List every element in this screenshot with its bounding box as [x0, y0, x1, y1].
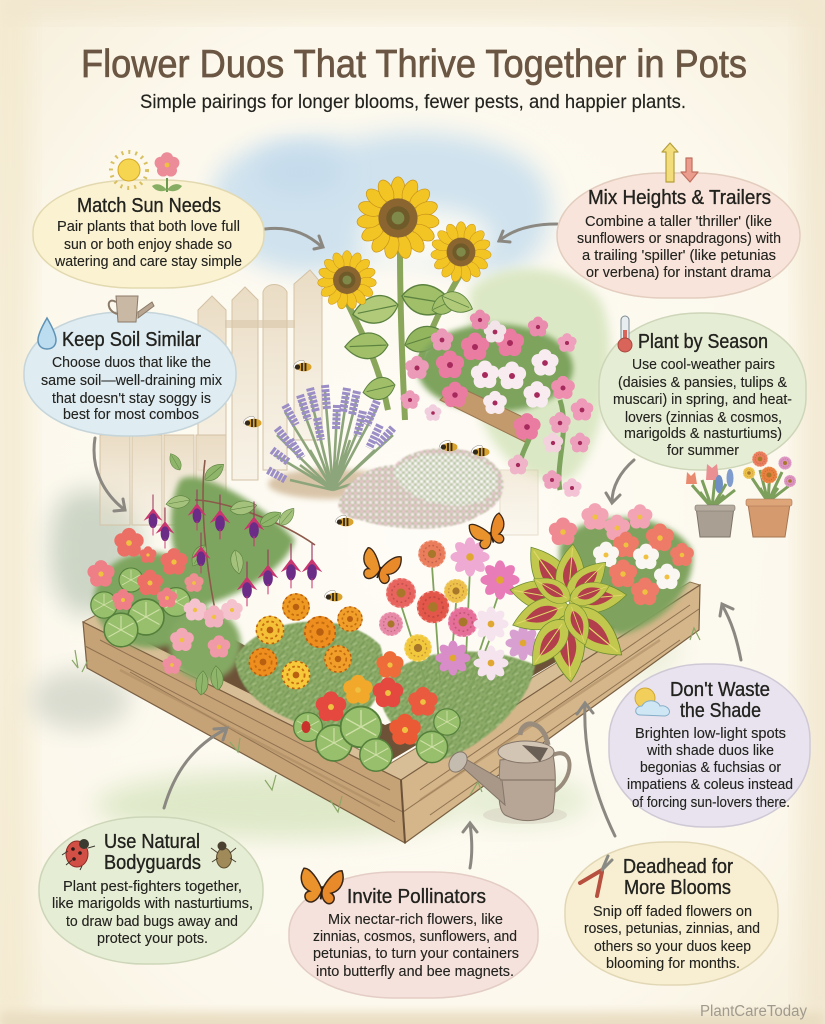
body text: watering and care stay simple — [54, 254, 242, 270]
arrow: pollinators up — [463, 823, 477, 868]
heading: Deadhead for — [623, 856, 733, 878]
icon: up and down arrows — [662, 143, 698, 182]
icon: thermometer — [618, 316, 632, 352]
body text: Plant pest-fighters together, — [63, 879, 242, 895]
lavender — [268, 385, 393, 499]
body text — [313, 912, 519, 980]
raised garden bed — [83, 582, 700, 843]
body text — [584, 904, 760, 972]
fuchsia plant — [144, 451, 322, 610]
subtitle: Simple pairings for longer blooms, fewer pests, and happier plants. — [140, 91, 686, 113]
body text: begonias & fuchsias or — [640, 760, 781, 776]
sunflower stems and leaves — [337, 250, 475, 420]
body text: petunias, to turn your containers — [313, 946, 519, 962]
hanging petunias — [400, 310, 593, 497]
marigolds and foliage — [235, 593, 384, 735]
panel: Don't Waste the Shade — [609, 664, 810, 827]
body text: into butterfly and bee magnets. — [316, 964, 514, 980]
body text: marigolds & nasturtiums) — [624, 426, 782, 442]
ladybug on leaf — [302, 721, 310, 733]
watercolor sky, bush and ground washes — [30, 132, 680, 839]
body text — [613, 357, 792, 459]
body text — [54, 219, 242, 270]
body text: Brighten low-light spots — [635, 726, 786, 742]
body text: Pair plants that both love full — [57, 219, 240, 235]
begonias — [87, 528, 243, 696]
watermark: PlantCareToday — [700, 1003, 807, 1020]
heading — [623, 856, 733, 899]
icon: butterfly — [298, 865, 344, 906]
body text: that doesn't stay soggy is — [52, 391, 211, 407]
body text: Snip off faded flowers on — [593, 904, 752, 920]
watering can — [445, 724, 570, 824]
icon: beetle — [211, 842, 236, 868]
body text: muscari) in spring, and heat- — [613, 392, 792, 408]
heading: Match Sun Needs — [77, 195, 221, 217]
panel: Invite Pollinators — [289, 865, 538, 998]
icon: water drop — [38, 318, 56, 349]
body text: same soil—well-draining mix — [41, 373, 223, 389]
body text: zinnias, cosmos, sunflowers, and — [313, 929, 517, 945]
body text: blooming for months. — [606, 956, 740, 972]
body text: best for most combos — [63, 407, 199, 423]
body text: of forcing sun-lovers there. — [632, 795, 790, 811]
heading: Don't Waste — [670, 679, 770, 701]
panel: Mix Heights & Trailers — [557, 143, 800, 298]
body text: a trailing 'spiller' (like petunias — [582, 248, 776, 264]
body text: impatiens & coleus instead — [627, 777, 793, 793]
title: Flower Duos That Thrive Together in Pots — [81, 43, 747, 86]
body text: like marigolds with nasturtiums, — [52, 896, 253, 912]
heading — [670, 679, 770, 722]
heading: Plant by Season — [638, 331, 768, 353]
heading — [104, 831, 201, 874]
grass tufts — [72, 628, 700, 812]
body text: Mix nectar-rich flowers, like — [328, 912, 503, 928]
icon: sun behind cloud — [635, 688, 669, 716]
coleus — [507, 538, 633, 683]
panel: Match Sun Needs — [33, 152, 264, 288]
panel: Use Natural Bodyguards — [39, 817, 263, 964]
body text: roses, petunias, zinnias, and — [584, 921, 760, 937]
arrow: soil to fence — [94, 438, 125, 511]
heading: Mix Heights & Trailers — [588, 187, 771, 209]
small potted tulips and muscari — [686, 464, 735, 537]
heading: Invite Pollinators — [347, 886, 486, 908]
body text: (daisies & pansies, tulips & — [618, 375, 787, 391]
heading: the Shade — [680, 700, 761, 722]
icon: pruners — [580, 856, 612, 896]
zinnias and cosmos — [379, 537, 541, 760]
body text: sunflowers or snapdragons) with — [577, 231, 781, 247]
icon: ladybug — [62, 839, 95, 870]
alyssum — [338, 448, 503, 529]
icon: watering can — [109, 296, 154, 322]
pollinators: butterflies and bees — [242, 359, 510, 601]
arrow: bodyguards to bed — [164, 728, 227, 808]
body text: others so your duos keep — [594, 939, 751, 955]
panel: Deadhead for More Blooms — [565, 842, 778, 985]
heading: More Blooms — [624, 877, 731, 899]
body text: Use cool-weather pairs — [632, 357, 775, 373]
wooden fence — [100, 270, 538, 535]
nasturtiums — [294, 651, 460, 771]
body text — [577, 214, 781, 281]
body text: protect your pots. — [97, 931, 208, 947]
impatiens — [549, 503, 694, 635]
arrow: season to bed — [606, 460, 634, 503]
sunflowers — [356, 177, 440, 260]
heading: Keep Soil Similar — [62, 329, 201, 351]
body text: to draw bad bugs away and — [66, 914, 238, 930]
arrow: heights to sunflowers — [499, 224, 557, 242]
body text: Combine a taller 'thriller' (like — [585, 214, 772, 230]
panel: Keep Soil Similar — [24, 296, 236, 436]
heading: Bodyguards — [104, 852, 201, 874]
arrow: shade to coleus — [720, 604, 741, 660]
heading: Use Natural — [104, 831, 200, 853]
arrow: sun needs to sunflowers — [265, 228, 323, 249]
body text — [41, 355, 223, 423]
body text: or verbena) for instant drama — [586, 265, 772, 281]
body text: sun or both enjoy shade so — [64, 237, 232, 253]
body text: Choose duos that like the — [52, 355, 211, 371]
icon: pink flower — [152, 152, 182, 192]
panel: Plant by Season — [599, 313, 806, 470]
body text: lovers (zinnias & cosmos, — [625, 410, 782, 426]
small potted zinnias — [743, 451, 796, 537]
body text: with shade duos like — [646, 743, 774, 759]
arrow: deadhead to flowers — [577, 703, 615, 836]
body text: for summer — [667, 443, 739, 459]
icon: sun — [111, 152, 147, 188]
body text — [627, 726, 793, 811]
body text — [52, 879, 253, 947]
